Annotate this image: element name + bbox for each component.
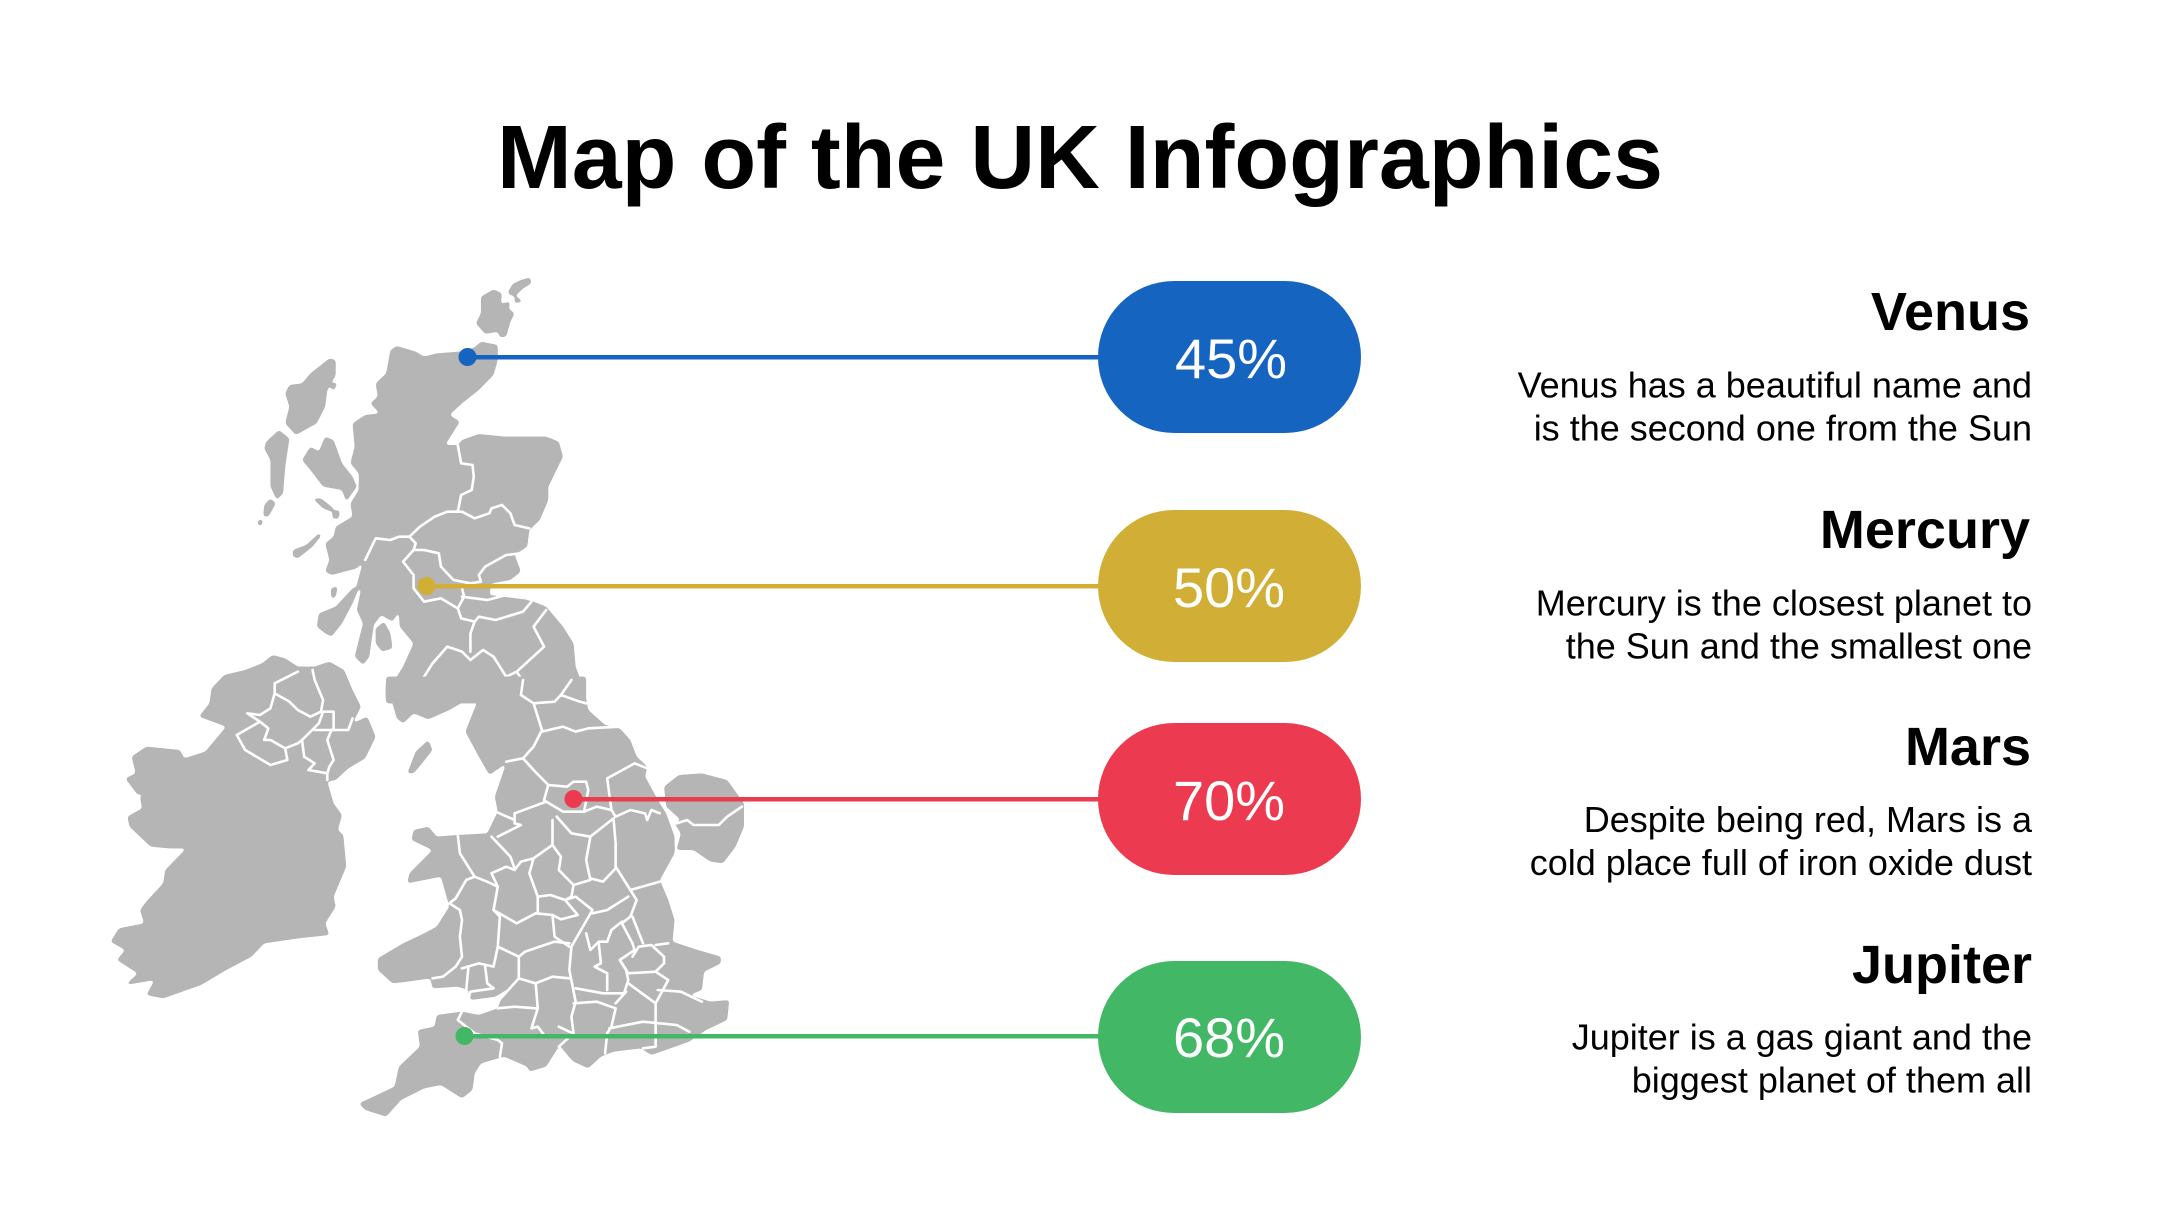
text block: Venus: Venus has a beautiful name and [1518, 364, 2032, 406]
marker 3: red connector and 70% pill [564, 723, 1361, 875]
text block: Mercury: the Sun and the smallest one [1566, 626, 2032, 666]
map: Isle of Man [407, 740, 433, 773]
marker 1: blue connector and 45% pill [458, 281, 1361, 433]
text block: Mercury [1536, 500, 2032, 666]
title: Map of the UK Infographics [497, 108, 1663, 208]
map of the UK and Ireland [111, 277, 744, 1117]
text block: Mars: cold place full of iron oxide dust [1530, 842, 2032, 883]
text block: Jupiter: Jupiter [1852, 935, 2032, 995]
text block: Jupiter: biggest planet of them all [1632, 1060, 2032, 1100]
marker 1: blue connector and 45% pill: 45% [1175, 327, 1287, 390]
text block: Venus [1518, 282, 2032, 448]
text block: Venus: is the second one from the Sun [1534, 408, 2032, 448]
text block: Jupiter [1572, 935, 2032, 1100]
text block: Venus: Venus [1871, 282, 2030, 342]
map: Scotland [258, 277, 586, 703]
marker 2: yellow connector and 50% pill: 50% [1173, 556, 1285, 619]
marker 3: red connector and 70% pill: 70% [1173, 769, 1285, 832]
text block: Mars [1530, 717, 2033, 883]
marker 4: green connector and 68% pill: 68% [1173, 1006, 1285, 1069]
text block: Mars: Despite being red, Mars is a [1584, 799, 2033, 840]
map: East Anglia [664, 773, 744, 863]
text block: Mars: Mars [1905, 717, 2031, 777]
text block: Mercury: Mercury [1820, 500, 2030, 560]
map: Ireland, England and Wales [111, 655, 744, 1117]
marker 4: green connector and 68% pill [456, 961, 1361, 1113]
text block: Jupiter: Jupiter is a gas giant and the [1572, 1016, 2032, 1058]
marker 2: yellow connector and 50% pill [418, 510, 1361, 662]
text block: Mercury: Mercury is the closest planet to [1536, 582, 2032, 624]
